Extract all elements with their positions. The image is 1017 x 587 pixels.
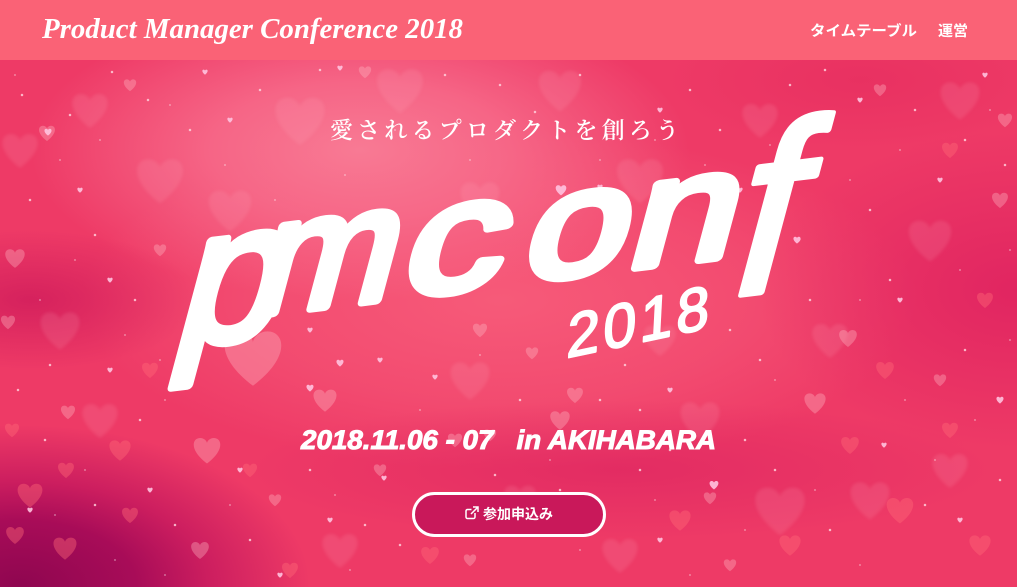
logo wordmark: m [238, 149, 429, 352]
navigation [810, 22, 968, 40]
event date and place: 2018.11.06 - 07 in AKIHABARA [300, 425, 716, 455]
header bar [0, 0, 1017, 60]
site title: Product Manager Conference 2018 [41, 14, 463, 45]
tagline: 愛されるプロダクトを創ろう [330, 118, 682, 143]
button label: 参加申込み [483, 506, 553, 522]
apply button [414, 494, 604, 536]
navigation: タイムテーブル [810, 22, 918, 40]
logo wordmark: c [388, 140, 536, 332]
logo year: 2018 [565, 271, 715, 371]
logo wordmark [152, 68, 846, 417]
logo wordmark: n [615, 114, 768, 302]
logo wordmark: o [510, 130, 658, 315]
icon: external link [466, 507, 478, 518]
logo wordmark: f [707, 68, 846, 349]
navigation: 運営 [938, 22, 968, 40]
logo: pmconf 2018 [152, 68, 846, 417]
logo wordmark: p [159, 155, 323, 390]
